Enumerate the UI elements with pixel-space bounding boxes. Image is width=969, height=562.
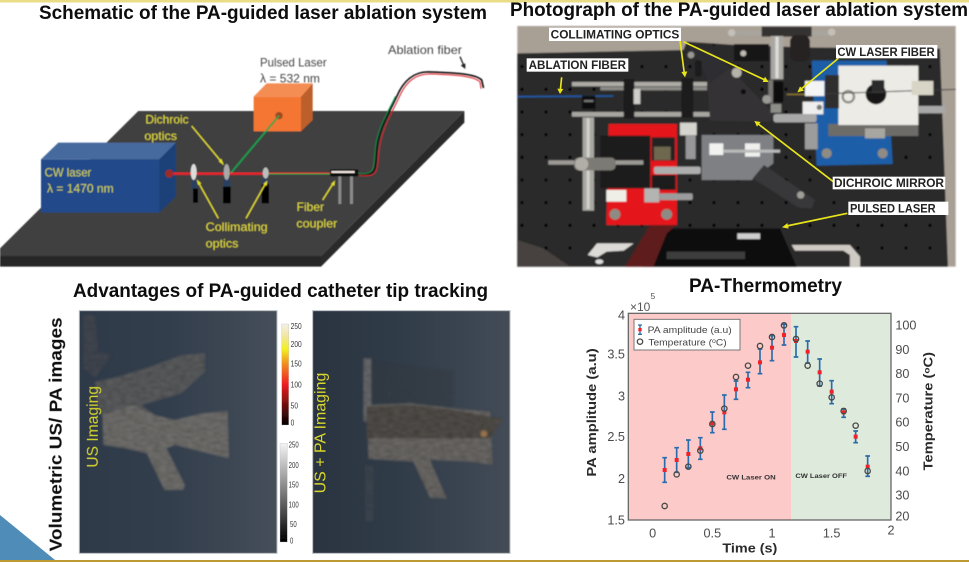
legend: o xyxy=(712,338,716,345)
rail rods and cage xyxy=(572,78,712,118)
laser beams xyxy=(173,116,330,174)
pulsed laser housing xyxy=(588,225,860,267)
rotated heading: Volumetric US/ PA images xyxy=(46,317,66,551)
left axis ticks xyxy=(607,308,625,527)
title: PA-thermometry: PA-Thermometry xyxy=(689,276,842,297)
x axis ticks: 2 xyxy=(887,523,895,537)
fiber coupler xyxy=(330,169,358,204)
left axis ticks: 1.5 xyxy=(607,513,625,527)
yellow pointers xyxy=(192,126,335,218)
label: dichroic mirror: DICHROIC MIRROR xyxy=(834,176,944,190)
heat colorbar: 200 xyxy=(291,340,302,349)
gray colorbar xyxy=(280,440,299,545)
blue ablation fiber xyxy=(517,94,613,99)
label: fiber coupler: Fiber xyxy=(297,201,324,214)
gray colorbar: 250 xyxy=(289,440,299,449)
right axis ticks: 70 xyxy=(895,391,909,405)
label: fiber coupler: coupler xyxy=(296,217,337,230)
label: collimating optics: Collimating xyxy=(206,221,268,234)
left axis ticks: 4 xyxy=(618,308,625,322)
title: advantages: Advantages of PA-guided catheter tip tracking xyxy=(73,281,488,302)
gray colorbar: 100 xyxy=(289,500,299,509)
legend: PA amplitude (a.u) xyxy=(648,325,732,335)
gray colorbar: 200 xyxy=(289,461,299,470)
heat colorbar: 50 xyxy=(291,402,298,411)
upper post assembly xyxy=(728,27,835,103)
exponent label: 5 xyxy=(650,291,655,301)
legend: C) xyxy=(716,338,727,348)
label: dichroic optics: optics xyxy=(144,130,177,143)
x axis label: Time (s) xyxy=(722,542,777,556)
bottom border stripe xyxy=(0,560,969,562)
x axis ticks: 0.5 xyxy=(704,527,721,541)
title: photograph: Photograph of the PA-guided laser ablation system xyxy=(510,0,968,21)
legend xyxy=(634,319,740,350)
label: ablation fiber: ABLATION FIBER xyxy=(529,58,626,72)
heat colorbar xyxy=(282,322,302,428)
US image xyxy=(79,311,277,553)
left axis ticks: 3.5 xyxy=(607,347,625,361)
ablation fiber xyxy=(358,72,483,176)
left axis ticks: 2.5 xyxy=(607,430,625,444)
right axis ticks: 50 xyxy=(895,440,909,454)
heat colorbar: 0 xyxy=(291,419,295,428)
callout pointers xyxy=(557,41,847,229)
left axis ticks: 2 xyxy=(618,472,625,486)
right axis label: o xyxy=(921,367,931,374)
right axis ticks xyxy=(895,319,916,523)
axes frame xyxy=(628,313,891,520)
right axis ticks: 60 xyxy=(895,416,909,430)
panel: system photograph xyxy=(517,26,956,267)
label: CW wavelength: λ = 1470 nm xyxy=(47,183,114,196)
US + PA image xyxy=(313,311,510,553)
left axis label: PA amplitude (a.u) xyxy=(585,348,599,477)
heat colorbar: 100 xyxy=(291,381,302,390)
red plate with stage xyxy=(600,124,701,225)
dark triangular mount xyxy=(687,43,781,122)
right axis ticks: 40 xyxy=(895,464,909,478)
temperature markers xyxy=(662,323,870,509)
label: US imaging: US Imaging xyxy=(85,386,102,468)
optical table platform xyxy=(0,111,464,267)
panel: volumetric imaging xyxy=(46,311,510,553)
label: pulsed laser: PULSED LASER xyxy=(850,201,936,215)
CW laser box xyxy=(41,143,176,213)
right axis ticks: 30 xyxy=(895,488,909,502)
laser off background xyxy=(791,313,891,520)
exponent label: ×10 xyxy=(630,300,650,314)
label: ablation fiber: Ablation fiber xyxy=(388,44,462,57)
chart: PA thermometry xyxy=(585,291,936,556)
annotation: laser on: CW Laser ON xyxy=(726,474,776,481)
label: collimating optics: COLLIMATING OPTICS xyxy=(551,27,679,41)
x axis ticks xyxy=(649,523,895,541)
right axis ticks: 100 xyxy=(895,319,916,333)
vertical post and knob xyxy=(548,117,643,211)
right axis label: Temperature ( xyxy=(922,387,936,470)
right axis ticks: 90 xyxy=(895,343,909,357)
heat colorbar: 250 xyxy=(291,322,302,331)
collimating and dichroic optics xyxy=(191,164,269,203)
x axis ticks: 1.5 xyxy=(823,527,840,541)
laser on background xyxy=(628,313,791,520)
top border stripe xyxy=(0,0,969,2)
legend: Temperature ( xyxy=(648,338,706,348)
black pointer xyxy=(460,57,465,69)
photo content xyxy=(517,26,956,267)
gray colorbar: 150 xyxy=(289,481,299,490)
corner decoration xyxy=(0,515,55,560)
label: CW laser: CW laser xyxy=(45,167,91,180)
right axis ticks: 80 xyxy=(895,367,909,381)
right axis label: C) xyxy=(922,352,936,367)
error bars xyxy=(662,324,870,482)
gray colorbar: 50 xyxy=(290,520,297,529)
gray colorbar: 0 xyxy=(290,536,294,545)
title: schematic: Schematic of the PA-guided laser ablation system xyxy=(39,3,487,24)
left axis ticks: 3 xyxy=(618,389,625,403)
gray plate with mounts xyxy=(680,123,815,208)
PA amplitude markers xyxy=(663,333,870,472)
label: pulsed laser: Pulsed Laser xyxy=(260,56,327,69)
heat colorbar: 150 xyxy=(291,360,302,369)
x axis ticks: 0 xyxy=(649,527,656,541)
panel: system schematic xyxy=(0,44,483,267)
right axis ticks: 20 xyxy=(895,509,909,523)
pulsed laser box xyxy=(254,83,313,131)
label: pulsed wavelength: λ = 532 nm xyxy=(260,72,320,85)
annotation: laser off: CW Laser OFF xyxy=(795,473,847,480)
label: dichroic optics: Dichroic xyxy=(145,113,189,126)
x axis ticks: 1 xyxy=(768,527,776,541)
label: US + PA imaging: US + PA Imaging xyxy=(313,373,330,493)
label: collimating optics: optics xyxy=(206,237,239,250)
blue plate and white stage xyxy=(773,61,956,166)
label: CW laser fiber: CW LASER FIBER xyxy=(837,45,935,59)
